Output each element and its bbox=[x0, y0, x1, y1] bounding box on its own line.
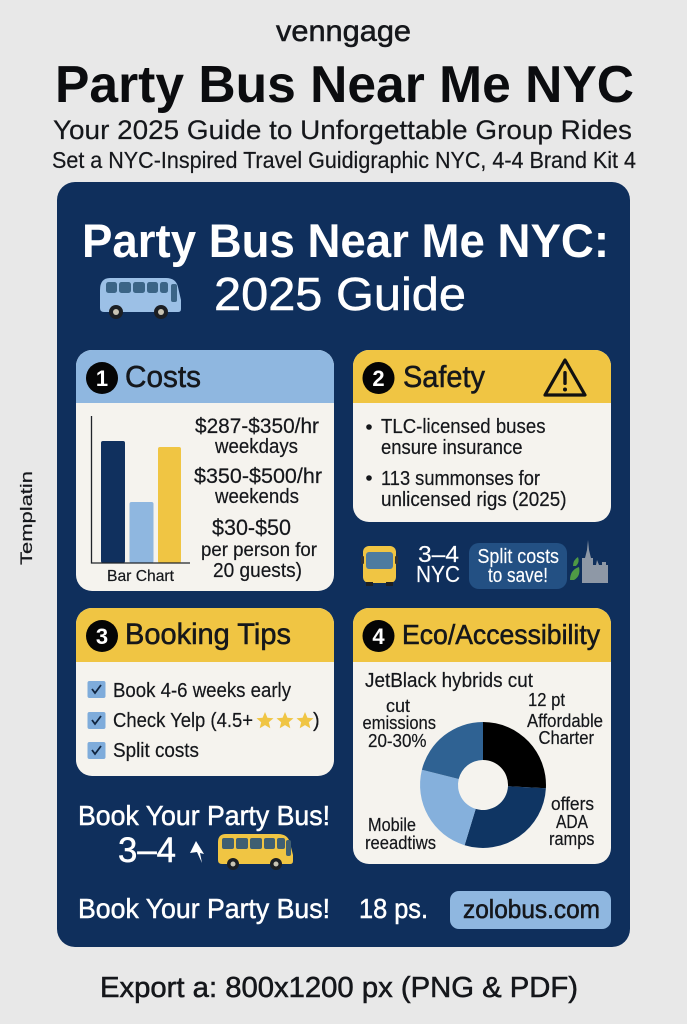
safety bullets bbox=[366, 416, 566, 511]
callout: split costs: Split costs bbox=[478, 546, 559, 568]
label: ADA ramps: ramps bbox=[549, 829, 594, 849]
callout: split costs: to save! bbox=[488, 565, 548, 587]
footer call to action: Book Your Party Bus! bbox=[78, 893, 330, 924]
button: zolobus.com: zolobus.com bbox=[463, 894, 600, 924]
label: cut emissions: cut bbox=[386, 696, 410, 716]
label: mobile: Mobile bbox=[368, 815, 416, 835]
panel: costs bbox=[76, 350, 334, 591]
costs header bbox=[76, 350, 334, 403]
checklist bbox=[88, 680, 320, 762]
panel: eco and accessibility bbox=[353, 608, 611, 864]
number badge 4 bbox=[362, 620, 394, 652]
eco heading: Eco/Accessibility bbox=[402, 619, 600, 650]
label: ADA ramps bbox=[549, 794, 594, 849]
safety bullets: TLC-licensed buses bbox=[381, 416, 546, 438]
icon: warning triangle bbox=[545, 360, 585, 395]
number badge 2 bbox=[362, 362, 394, 394]
export note: Export a: 800x1200 px (PNG & PDF) bbox=[100, 972, 578, 1004]
size note: 18 ps. bbox=[359, 893, 428, 924]
label: affordable charter bbox=[527, 690, 603, 748]
cost figures: weekends bbox=[214, 486, 299, 508]
label: affordable charter: 12 pt bbox=[528, 690, 565, 710]
label: cut emissions bbox=[362, 696, 436, 751]
label: ADA ramps: ADA bbox=[556, 812, 588, 832]
label: cut emissions: 20-30% bbox=[368, 731, 426, 751]
subtitle: Your 2025 Guide to Unforgettable Group Rides bbox=[53, 115, 632, 145]
number badge 3: 3 bbox=[96, 624, 108, 649]
number badge 1: 1 bbox=[96, 366, 108, 391]
cost figures: 20 guests) bbox=[213, 560, 302, 582]
tagline: Set a NYC-Inspired Travel Guidigraphic NYC, 4-4 Brand Kit 4 bbox=[52, 147, 636, 173]
safety bullets: unlicensed rigs (2025) bbox=[381, 489, 566, 511]
cost figures: $350-$500/hr bbox=[194, 465, 322, 488]
call to action number: 3–4 bbox=[118, 831, 176, 870]
chart label: Bar Chart bbox=[107, 568, 175, 585]
label: affordable charter: Charter bbox=[538, 728, 594, 748]
logo: venngage: venngage bbox=[276, 15, 411, 48]
label: mobile bbox=[365, 815, 436, 853]
costs heading: Costs bbox=[125, 359, 201, 394]
number badge 2: 2 bbox=[372, 366, 385, 391]
bar chart bbox=[92, 416, 190, 585]
cost figures: weekdays bbox=[214, 436, 298, 458]
safety header bbox=[353, 350, 611, 403]
call to action heading: Book Your Party Bus! bbox=[78, 800, 330, 831]
callout: split costs bbox=[469, 543, 567, 589]
route text bbox=[416, 541, 460, 587]
cost figures: $30-$50 bbox=[212, 515, 291, 540]
eco intro text: JetBlack hybrids cut bbox=[365, 670, 533, 692]
eco header bbox=[353, 608, 611, 662]
cost figures: per person for bbox=[201, 540, 318, 561]
safety bullets: ensure insurance bbox=[381, 437, 522, 459]
panel subtitle: 2025 Guide bbox=[214, 268, 466, 320]
booking header bbox=[76, 608, 334, 662]
main navy panel bbox=[57, 182, 630, 947]
panel: booking tips bbox=[76, 608, 334, 776]
icon: light blue bus bbox=[100, 278, 181, 319]
title: Party Bus Near Me NYC bbox=[55, 56, 634, 114]
booking heading: Booking Tips bbox=[125, 618, 291, 651]
icon: yellow bus bbox=[218, 834, 293, 870]
route text: 3–4 bbox=[418, 541, 459, 567]
panel: safety bbox=[353, 350, 611, 522]
label: ADA ramps: offers bbox=[551, 794, 594, 814]
panel title: Party Bus Near Me NYC: bbox=[82, 214, 609, 267]
icon: city skyline with leaf bbox=[570, 540, 608, 583]
checklist: Book 4-6 weeks early bbox=[113, 680, 291, 702]
safety bullets: 113 summonses for bbox=[381, 468, 540, 490]
safety heading: Safety bbox=[403, 359, 485, 394]
checklist: Check Yelp (4.5+ bbox=[113, 710, 253, 732]
label: cut emissions: emissions bbox=[362, 713, 436, 733]
cost figures: $287-$350/hr bbox=[195, 415, 319, 438]
label: mobile: reeadtiws bbox=[365, 833, 436, 853]
icon: cursor arrow bbox=[190, 841, 204, 863]
cost figures bbox=[194, 415, 322, 582]
checklist: Split costs bbox=[113, 740, 199, 762]
side label: Templatin: Templatin bbox=[17, 471, 36, 565]
number badge 1 bbox=[86, 362, 118, 394]
number badge 4: 4 bbox=[372, 624, 385, 649]
icon: yellow bus front bbox=[361, 546, 398, 586]
label: affordable charter: Affordable bbox=[527, 711, 603, 731]
checklist: ) bbox=[313, 710, 320, 732]
donut chart bbox=[420, 722, 546, 848]
number badge 3 bbox=[86, 620, 118, 652]
route text: NYC bbox=[416, 561, 460, 587]
